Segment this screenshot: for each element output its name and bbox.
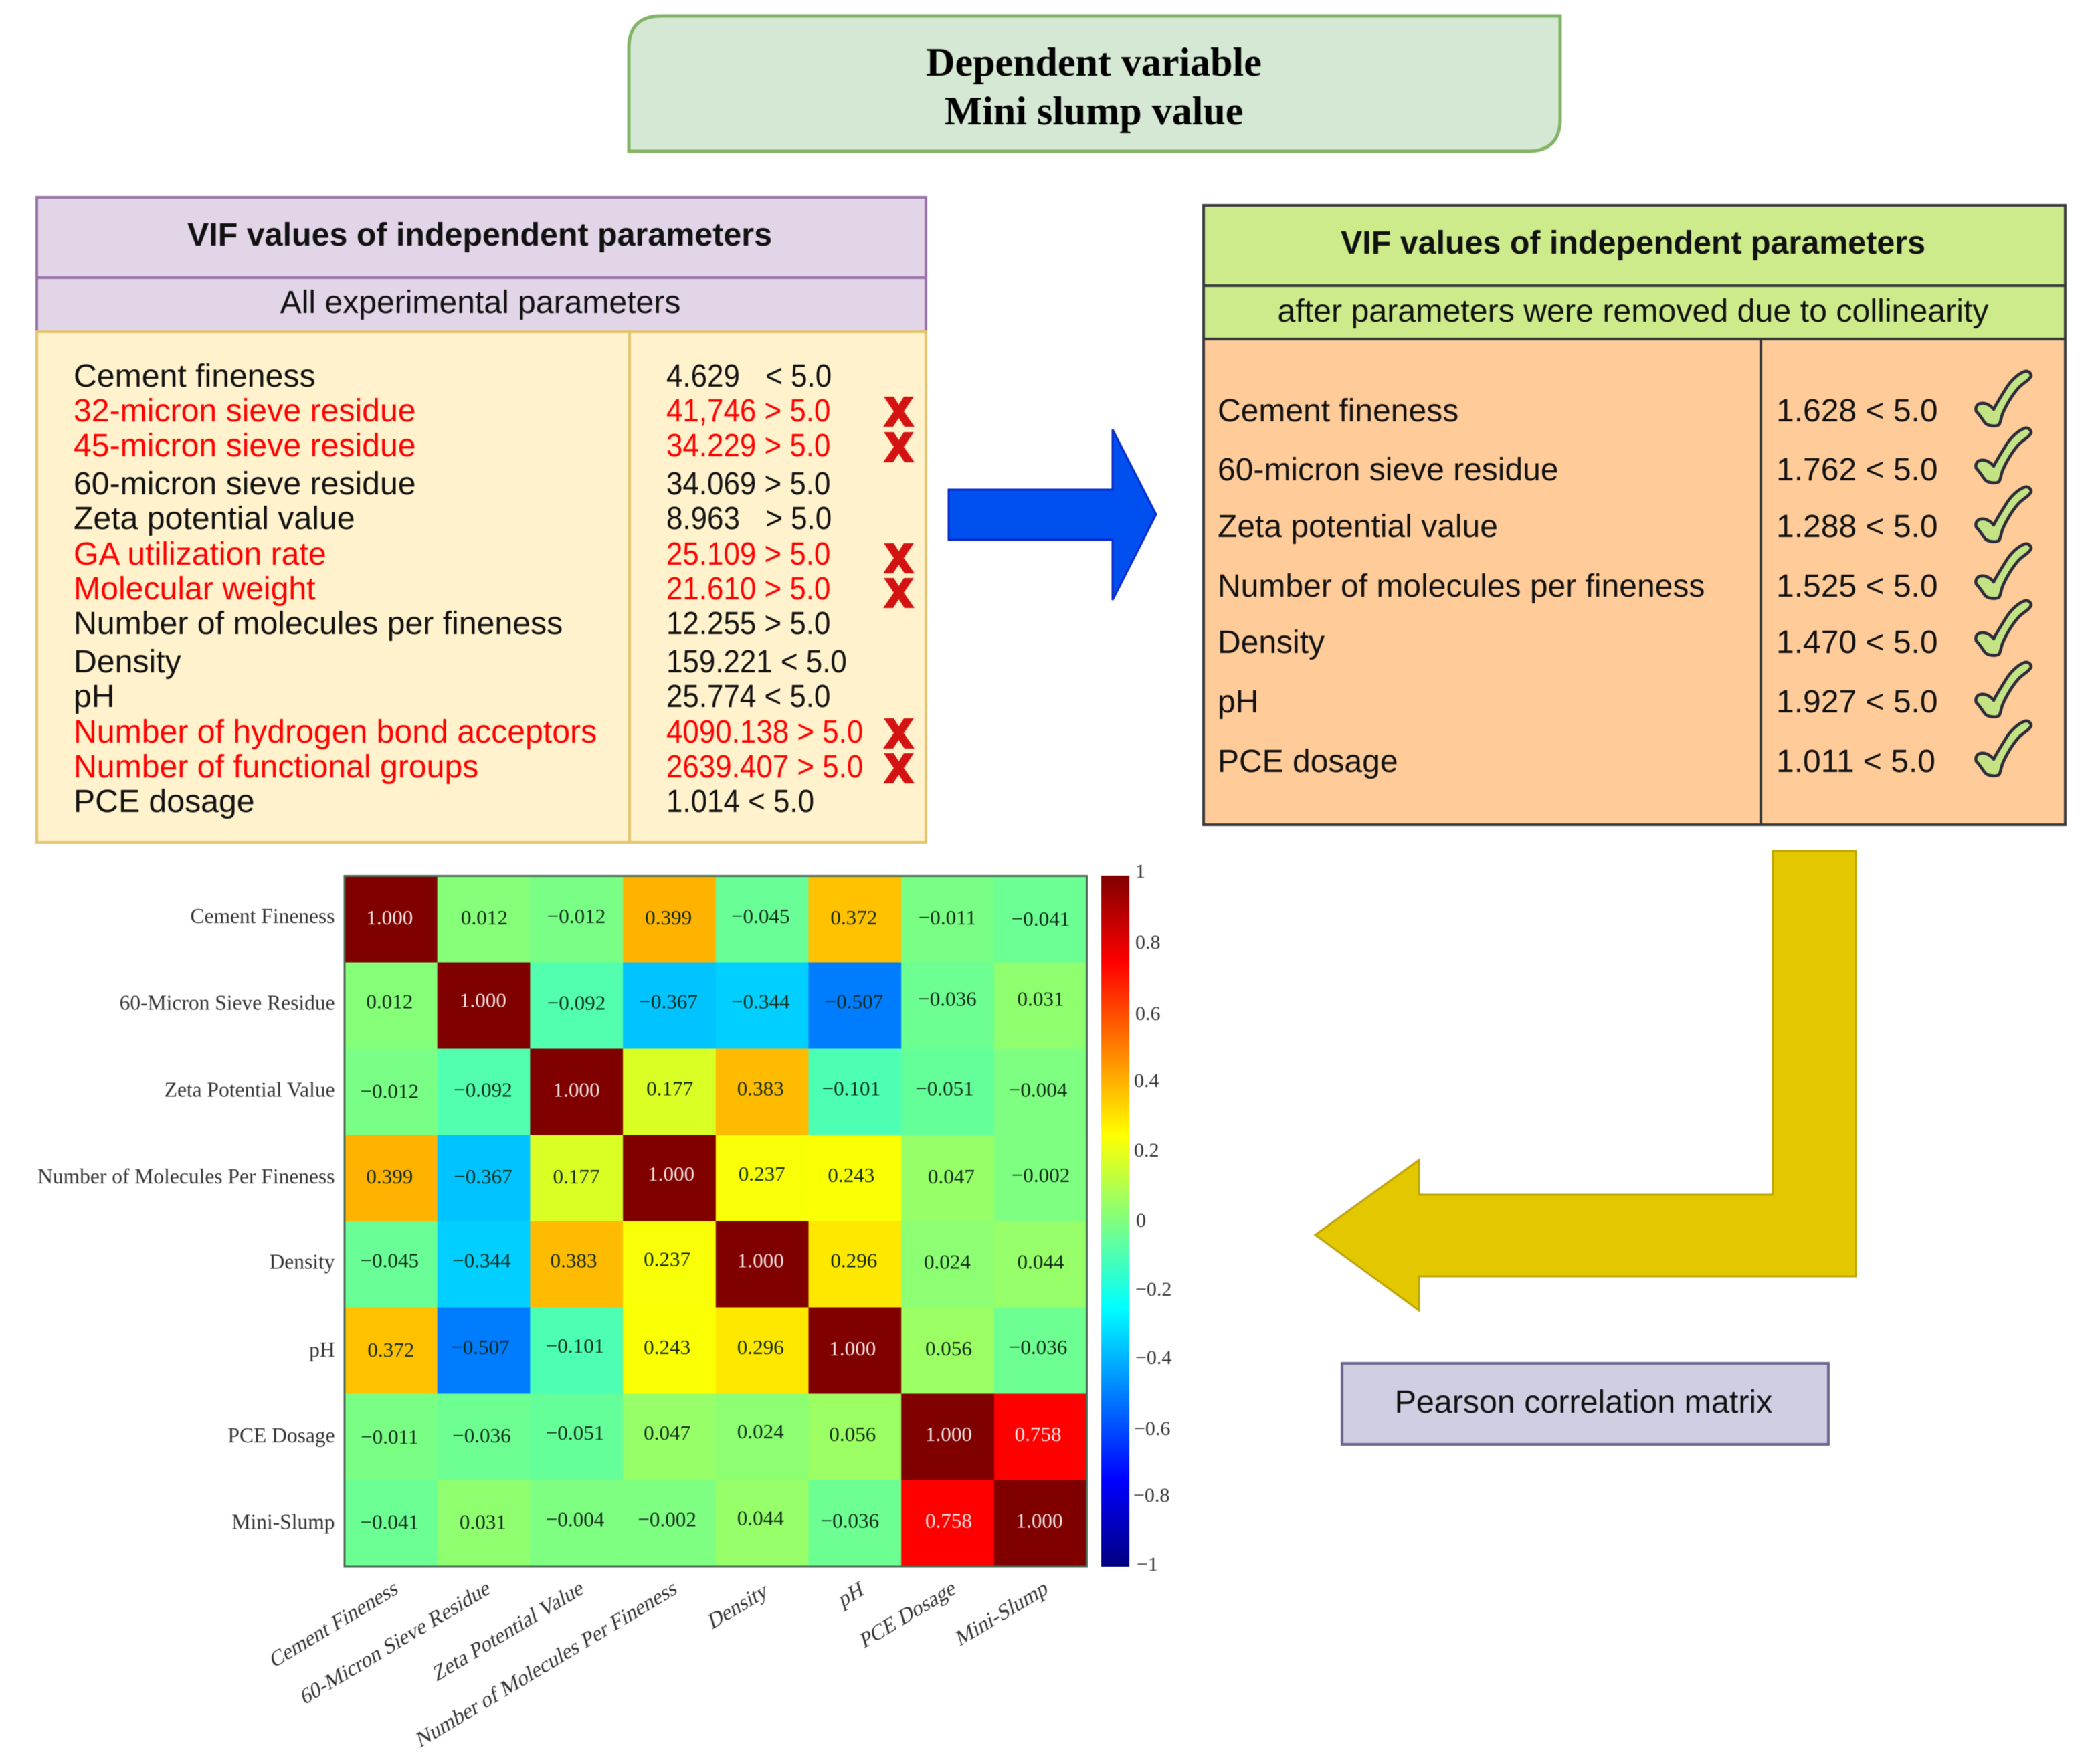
heatmap cell values: −0.344 <box>731 990 790 1013</box>
table body <box>37 332 926 842</box>
heatmap cell values: −0.036 <box>1009 1335 1067 1359</box>
heatmap cell values: −0.002 <box>638 1507 696 1531</box>
heatmap cell values: 0.399 <box>645 906 692 929</box>
heatmap cell values: 0.296 <box>737 1335 784 1359</box>
color scale bar: −0.6 <box>1134 1417 1170 1440</box>
VIF values: < 5.0 <box>765 357 832 393</box>
parameter names: Density <box>1218 625 1325 660</box>
parameter names: Zeta potential value <box>1218 509 1498 545</box>
x axis labels: Zeta Potential Value <box>431 1575 586 1687</box>
y axis labels: 60-Micron Sieve Residue <box>120 991 335 1015</box>
heatmap cell values: 1.000 <box>553 1078 600 1101</box>
heatmap cell values: −0.012 <box>547 904 605 928</box>
heatmap cell values: −0.036 <box>821 1508 879 1532</box>
VIF values: 1.927 < 5.0 <box>1776 684 1938 720</box>
heatmap cell values: 0.177 <box>646 1076 693 1100</box>
heatmap cell values: 0.012 <box>461 906 508 929</box>
color scale bar: −0.4 <box>1135 1347 1171 1369</box>
title: dependent variable <box>629 16 1560 151</box>
heatmap cell values: 0.383 <box>737 1076 784 1100</box>
parameter names: Zeta potential value <box>74 500 355 536</box>
y axis labels: Number of Molecules Per Fineness <box>37 1165 335 1188</box>
heatmap cell values: 0.237 <box>644 1248 690 1271</box>
heatmap cell values: 0.383 <box>551 1249 597 1272</box>
heatmap cells <box>345 876 1087 1567</box>
color scale bar: −1 <box>1137 1553 1158 1575</box>
panel heading: All experimental parameters <box>280 284 680 320</box>
VIF values: 1.014 < 5.0 <box>666 783 814 819</box>
VIF values: 4.629 <box>666 357 740 393</box>
heatmap cell values: 1.000 <box>829 1337 876 1360</box>
VIF values: 41,746 > 5.0 <box>666 392 830 428</box>
VIF values: 1.011 < 5.0 <box>1776 744 1935 779</box>
parameter names: 45-micron sieve residue <box>74 427 416 464</box>
VIF values: 8.963 <box>666 500 740 536</box>
heatmap cell values: 1.000 <box>648 1162 694 1185</box>
parameter names: 60-micron sieve residue <box>1218 452 1559 488</box>
y axis labels: Zeta Potential Value <box>165 1078 335 1101</box>
x axis labels: Number of Molecules Per Fineness <box>414 1575 679 1753</box>
heatmap cell values: −0.101 <box>546 1334 604 1357</box>
heatmap cell values: −0.036 <box>918 987 977 1011</box>
heatmap cell values: 1.000 <box>1016 1508 1063 1532</box>
parameter names: Number of molecules per fineness <box>1218 569 1705 604</box>
heatmap cell values: 0.243 <box>828 1163 874 1187</box>
heatmap cell values: 0.399 <box>366 1165 413 1188</box>
heatmap cell values: 1.000 <box>366 906 413 929</box>
parameter names: PCE dosage <box>74 783 255 819</box>
heatmap cell values: 1.000 <box>925 1422 972 1446</box>
heatmap cell values: 0.296 <box>830 1249 877 1272</box>
VIF values: 159.221 < 5.0 <box>666 643 847 679</box>
VIF values: > 5.0 <box>765 500 832 536</box>
heatmap cell values: −0.004 <box>1009 1078 1068 1101</box>
panel heading: VIF values of independent parameters <box>1341 225 1925 261</box>
heatmap cell values: −0.012 <box>361 1079 419 1102</box>
parameter names: 32-micron sieve residue <box>74 393 416 429</box>
parameter names: pH <box>1218 684 1258 720</box>
heatmap cell values: 0.243 <box>644 1335 690 1359</box>
table body <box>1204 339 2065 825</box>
x axis labels <box>268 1575 1050 1753</box>
heatmap cell values: −0.041 <box>1012 907 1070 930</box>
heatmap cell values: 0.044 <box>737 1506 784 1529</box>
heatmap cell values: −0.011 <box>361 1425 419 1448</box>
heatmap cell values: 0.372 <box>367 1338 414 1361</box>
title: dependent variable: Mini slump value <box>945 89 1243 133</box>
heatmap cell values: −0.092 <box>454 1078 512 1101</box>
heatmap cell values: 1.000 <box>737 1249 784 1272</box>
heatmap cell values: 0.031 <box>460 1510 506 1533</box>
y axis labels: Mini-Slump <box>232 1510 335 1533</box>
y axis labels: Density <box>270 1250 335 1274</box>
heatmap cell values: −0.051 <box>546 1421 604 1444</box>
panel heading <box>1204 205 2065 339</box>
heatmap cell values: 0.372 <box>830 906 877 929</box>
VIF values: 12.255 > 5.0 <box>666 605 830 641</box>
VIF values <box>666 357 863 819</box>
parameter names: Cement fineness <box>1218 393 1458 429</box>
VIF values: 1.628 < 5.0 <box>1776 393 1938 429</box>
x axis labels: Density <box>706 1577 771 1635</box>
color scale bar: 0.4 <box>1134 1070 1159 1092</box>
icons: red crosses on removed parameters <box>883 397 915 783</box>
heatmap cell values: −0.367 <box>454 1165 512 1188</box>
parameter names <box>1218 393 1705 779</box>
parameter names: PCE dosage <box>1218 744 1398 779</box>
color scale bar <box>1101 860 1171 1575</box>
heatmap cell values: −0.004 <box>546 1507 605 1531</box>
heatmap cell values: 0.177 <box>553 1165 600 1188</box>
x axis labels: Mini-Slump <box>954 1575 1050 1652</box>
heatmap cell values: −0.367 <box>639 990 698 1013</box>
parameter names: 60-micron sieve residue <box>74 466 416 502</box>
VIF values: 1.762 < 5.0 <box>1776 452 1938 488</box>
parameter names: pH <box>74 678 115 714</box>
heatmap cell values: −0.507 <box>825 990 883 1013</box>
title: dependent variable: Dependent variable <box>926 40 1262 84</box>
panel: VIF values after removing collinear parameters <box>1204 205 2065 825</box>
heatmap cell values <box>361 904 1070 1533</box>
heatmap cell values: −0.041 <box>361 1510 419 1533</box>
VIF values: 1.288 < 5.0 <box>1776 509 1938 545</box>
chart: correlation heatmap <box>37 860 1171 1753</box>
panel heading: after parameters were removed due to collinearity <box>1277 293 1989 329</box>
x axis labels: 60-Micron Sieve Residue <box>298 1575 492 1710</box>
parameter names: Number of functional groups <box>74 749 478 785</box>
panel heading <box>37 197 926 332</box>
heatmap cell values: 0.056 <box>925 1337 972 1360</box>
x axis labels: pH <box>837 1576 866 1613</box>
heatmap cell values: −0.507 <box>451 1335 510 1359</box>
y axis labels <box>37 904 335 1533</box>
color scale bar: 0.2 <box>1134 1139 1159 1161</box>
parameter names <box>74 358 597 819</box>
VIF values: 2639.407 > 5.0 <box>666 748 863 784</box>
heatmap cell values: −0.045 <box>361 1249 419 1272</box>
heatmap cell values: −0.344 <box>452 1249 511 1272</box>
label: Pearson correlation matrix: Pearson correlation matrix <box>1395 1384 1772 1420</box>
VIF values: 25.109 > 5.0 <box>666 535 830 571</box>
color scale bar: 1 <box>1135 860 1145 882</box>
x axis labels: Cement Fineness <box>268 1575 401 1674</box>
y axis labels: pH <box>309 1338 335 1361</box>
heatmap cell values: 0.237 <box>739 1162 785 1185</box>
heatmap cell values: 0.024 <box>924 1250 971 1274</box>
heatmap cell values: 0.758 <box>925 1508 972 1532</box>
heatmap cell values: −0.092 <box>547 991 605 1015</box>
VIF values: 25.774 < 5.0 <box>666 678 830 714</box>
y axis labels: PCE Dosage <box>227 1424 335 1447</box>
icons: green check marks <box>1976 371 2031 776</box>
VIF values: 1.470 < 5.0 <box>1776 625 1938 660</box>
heatmap cell values: 1.000 <box>460 989 506 1012</box>
parameter names: Density <box>74 644 181 680</box>
parameter names: Cement fineness <box>74 358 316 394</box>
heatmap cell values: 0.024 <box>737 1419 784 1443</box>
VIF values: 34.229 > 5.0 <box>666 427 830 463</box>
arrow: blue right arrow <box>949 429 1156 600</box>
color scale bar: 0.6 <box>1135 1003 1160 1025</box>
heatmap cell values: −0.051 <box>915 1076 974 1100</box>
heatmap cell values: −0.101 <box>822 1076 880 1100</box>
parameter names: GA utilization rate <box>74 536 326 572</box>
parameter names: Number of molecules per fineness <box>74 605 563 642</box>
parameter names: Molecular weight <box>74 571 316 607</box>
heatmap cell values: 0.056 <box>829 1422 876 1446</box>
panel: VIF values of all experimental parameters <box>37 197 926 842</box>
color scale bar: −0.8 <box>1133 1484 1169 1506</box>
VIF values: 34.069 > 5.0 <box>666 465 830 501</box>
heatmap cell values: 0.031 <box>1018 987 1064 1011</box>
color scale bar: 0 <box>1136 1209 1146 1232</box>
label: Pearson correlation matrix <box>1342 1363 1828 1444</box>
heatmap cell values: −0.045 <box>731 904 790 928</box>
VIF values: 4090.138 > 5.0 <box>666 713 863 749</box>
arrow: gold elbow arrow <box>1315 851 1856 1310</box>
heatmap cell values: 0.044 <box>1018 1250 1064 1274</box>
VIF values: 21.610 > 5.0 <box>666 570 830 606</box>
heatmap cell values: 0.758 <box>1015 1422 1062 1446</box>
heatmap cell values: 0.047 <box>928 1165 975 1188</box>
color scale bar: 0.8 <box>1135 931 1160 953</box>
parameter names: Number of hydrogen bond acceptors <box>74 714 597 750</box>
heatmap cell values: −0.036 <box>452 1424 511 1447</box>
heatmap cell values: −0.011 <box>919 906 976 929</box>
VIF values <box>1776 393 1938 779</box>
x axis labels: PCE Dosage <box>858 1575 958 1654</box>
panel heading: VIF values of independent parameters <box>187 217 772 253</box>
VIF values: 1.525 < 5.0 <box>1776 569 1938 604</box>
heatmap cell values: −0.002 <box>1012 1163 1070 1187</box>
color scale bar: −0.2 <box>1135 1278 1171 1300</box>
y axis labels: Cement Fineness <box>190 904 335 928</box>
heatmap cell values: 0.047 <box>644 1421 690 1444</box>
heatmap cell values: 0.012 <box>366 990 413 1013</box>
